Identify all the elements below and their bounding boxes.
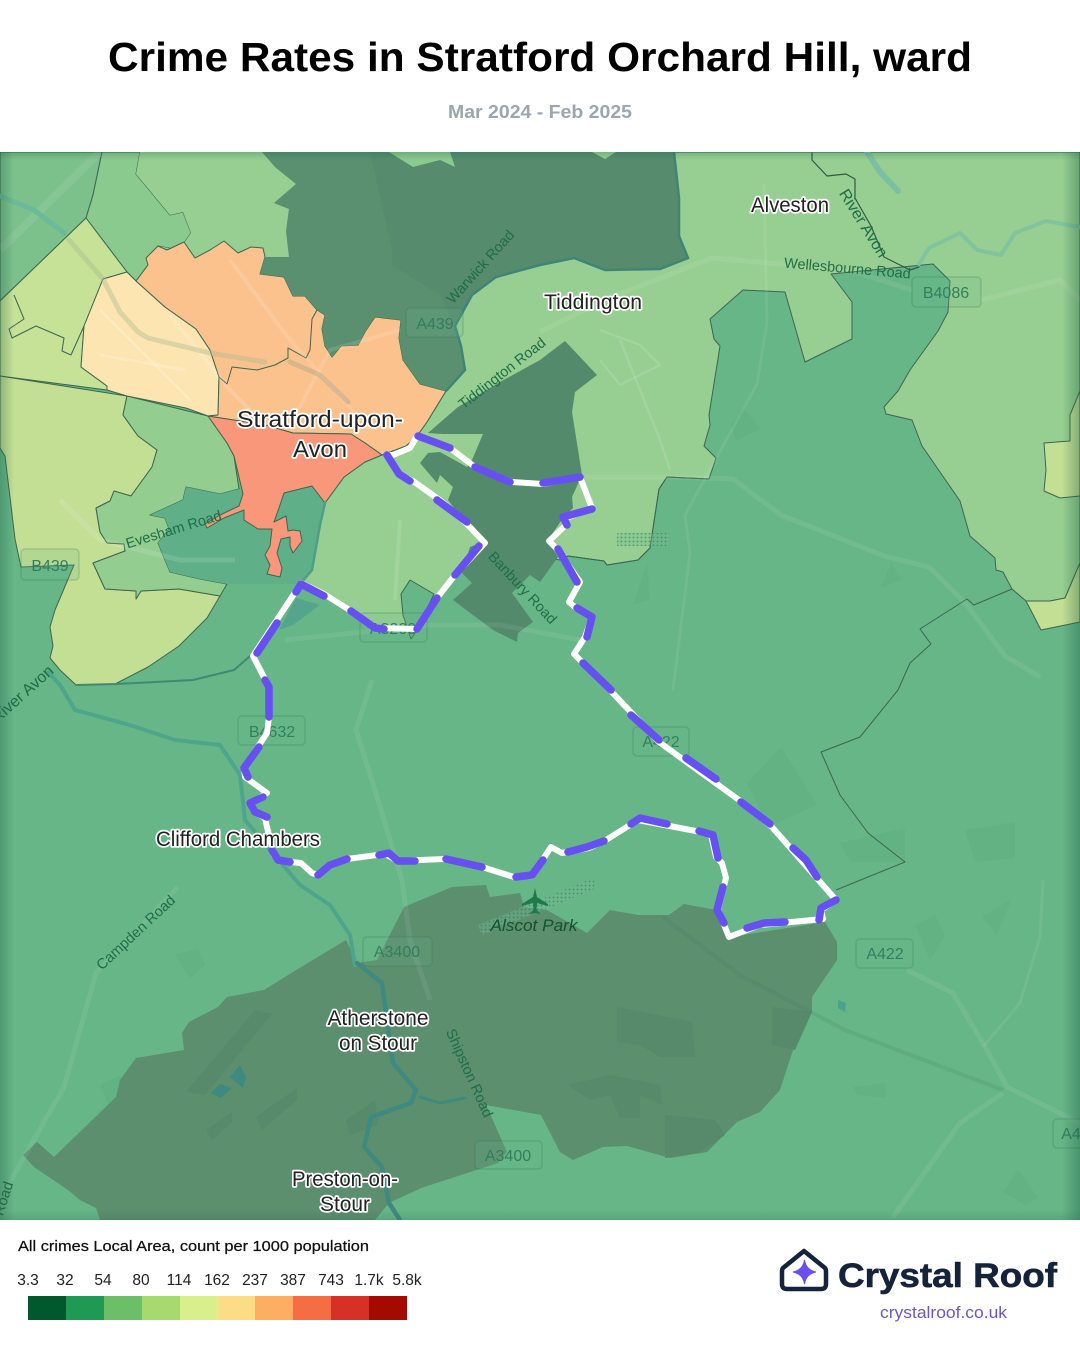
label: Alscot Park: Alscot Park [489,916,579,935]
legend tick labels: 743 [318,1272,344,1289]
area: darker riverside green [150,487,240,584]
legend tick labels: 387 [280,1272,306,1289]
legend tick labels [17,1272,422,1289]
place labels: Stratford-upon- [237,406,403,432]
roads: faint network [0,152,1080,1217]
fields: darker patches [665,1012,812,1158]
area: salmon high crime [205,416,382,577]
road shields: A422 [866,946,904,963]
area: yellow green north west [0,218,127,390]
rivers [48,152,1080,1220]
ward outline: purple dashes [244,436,836,928]
place labels [156,194,829,1216]
map edge vignette [0,152,1080,1220]
area: dark green north [260,152,688,391]
river edge: north dark area [446,152,688,391]
road labels: Wellesbourne Road [783,256,911,283]
road labels: Shipston Road [442,1027,495,1120]
road labels: Warwick Road [444,227,518,307]
legend tick labels: 162 [204,1272,230,1289]
area: notch south of ward [401,580,434,639]
area: cut-out north 2 [592,152,616,159]
north-west inner ward line [9,295,84,355]
place labels: Preston-on- [292,1168,398,1191]
area: north light green [136,152,296,258]
area: yellow green south east [1026,563,1080,630]
base area: mid green [0,152,1080,1220]
place labels: Stour [320,1193,370,1216]
lakes [211,598,846,1098]
area: Evesham light green [93,396,239,599]
website: crystalroof.co.uk [880,1304,1008,1322]
road shields: A3400 [485,1148,531,1165]
place labels: Alveston [751,194,829,217]
title: Crime Rates in Stratford Orchard Hill, ward [108,34,972,80]
choropleth map [0,152,1080,1220]
legend tick labels: 237 [242,1272,268,1289]
place labels: Clifford Chambers [156,828,320,851]
area: orange town centre [136,241,446,455]
legend tick labels: 1.7k [354,1272,384,1289]
legend tick labels: 54 [94,1272,112,1289]
road shields: A422 [642,734,680,751]
area: yellow green east [1044,391,1080,498]
road labels [0,186,911,1218]
icon: house outline [782,1251,826,1289]
place labels: Tiddington [544,291,642,314]
fields: faint mid-green patches [100,407,1038,1205]
area: dark green southern lobes [23,885,837,1220]
area: north-west green [86,152,191,281]
legend title: All crimes Local Area, count per 1000 population [18,1238,369,1255]
area: pale yellow town [81,272,219,416]
area: east light green [300,152,1080,629]
legend tick labels: 5.8k [392,1272,422,1289]
road labels: Tiddington Road [456,335,549,413]
road labels: Banbury Road [484,549,559,628]
road shields: A439 [416,316,454,333]
airfield strips [478,533,669,935]
area: yellow green south west [0,376,220,685]
legend colour scale [28,1296,407,1320]
legend tick labels: 32 [56,1272,74,1289]
icon: airport plane [522,888,548,914]
area: cut-out north [389,152,455,167]
area: darker part of north block [370,152,688,326]
road labels: River Avon [835,186,890,261]
road shields: B4086 [923,285,969,302]
ward outline: white [244,436,836,937]
area: mid green east [568,477,709,565]
road shields: A3200 [370,621,416,638]
legend tick labels: 3.3 [17,1272,39,1289]
road labels: Campden Road [94,893,179,974]
road labels: Evesham Road [124,508,224,552]
legend [17,1238,422,1320]
place labels: Atherstone [328,1007,428,1030]
logo wordmark: Crystal Roof [838,1257,1058,1295]
ward boundaries south east [821,589,1012,890]
road shields: B439 [31,558,69,575]
road shields [21,277,1080,1169]
place labels: Avon [293,436,347,462]
icon: purple star [793,1260,816,1284]
canal: faded line [0,196,348,402]
road shields: A3400 [374,944,420,961]
railway: darker track [811,1011,1004,1092]
orange inner ward line [219,310,317,384]
area: north-west corner [0,152,102,301]
logo: Crystal Roof [782,1251,1058,1322]
area: dark green Tiddington [420,341,597,642]
place labels: on Stour [339,1032,417,1055]
ward boundary: dashed white and purple [244,436,836,937]
road shields: B4632 [249,724,295,741]
subtitle: Mar 2024 - Feb 2025 [448,101,632,122]
legend tick labels: 80 [132,1272,150,1289]
legend tick labels: 114 [167,1272,192,1289]
